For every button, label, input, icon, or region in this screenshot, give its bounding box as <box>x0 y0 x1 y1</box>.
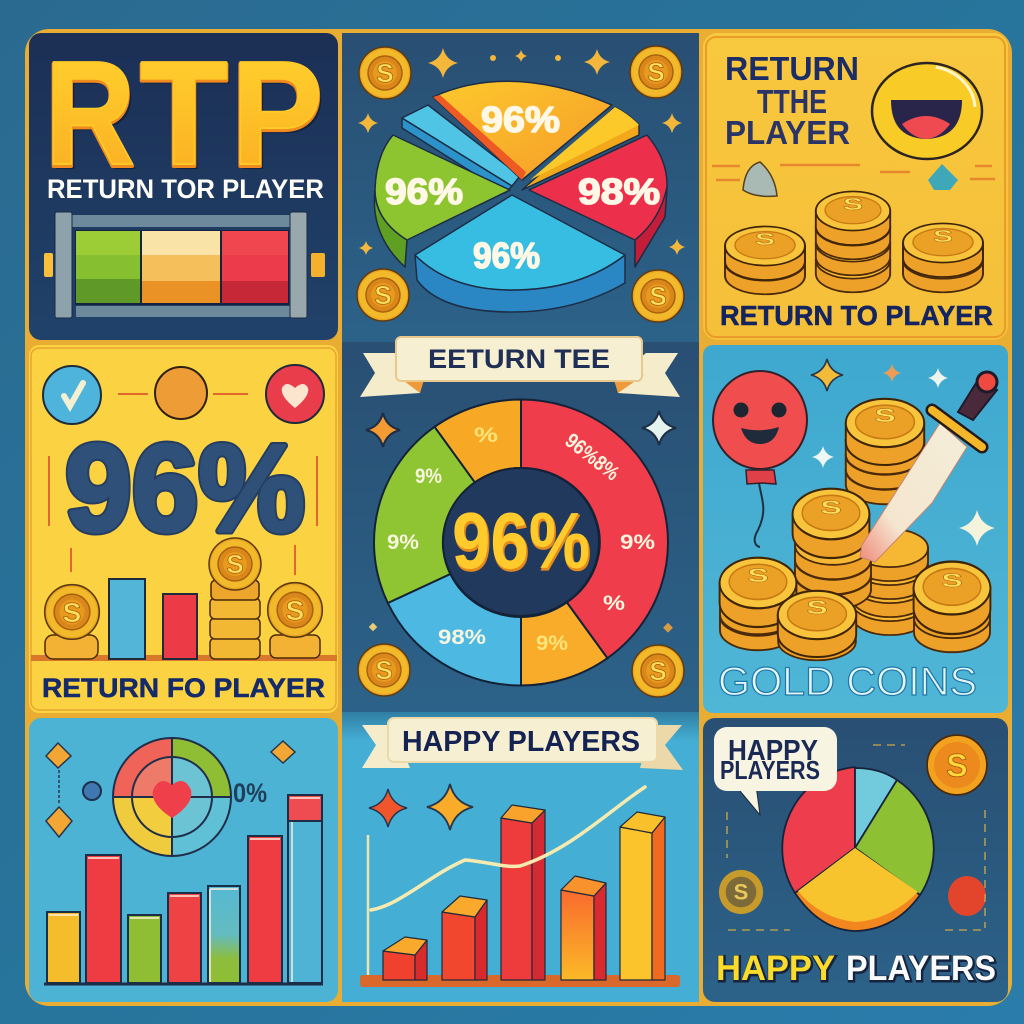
icon: dim coin <box>719 870 763 914</box>
heading: RTP: P <box>234 36 326 201</box>
middle coin stack: S <box>820 497 842 518</box>
heading: RTP: R <box>45 31 135 196</box>
pie labels: 96% <box>473 235 540 276</box>
heading: TTHE <box>757 83 827 120</box>
coin stack and bars: S <box>226 549 244 579</box>
icon: check badge <box>43 366 101 424</box>
icon: coins <box>357 46 684 322</box>
panel: donut chart <box>342 337 699 714</box>
icon: battery gauge <box>44 212 325 318</box>
panel: target and bars <box>29 718 338 1002</box>
icon: coins: S <box>376 58 394 88</box>
decorative dashes <box>712 165 995 180</box>
small icon: circle mark <box>83 782 101 800</box>
icon: coin: S <box>946 747 968 783</box>
pie labels: 96% <box>481 99 560 140</box>
icon: coins: S <box>375 655 393 685</box>
pie labels <box>385 99 660 276</box>
heading: RTP: P <box>231 33 323 198</box>
coin stack and bars: S <box>286 595 304 626</box>
panel: gold coins <box>703 345 1008 713</box>
caption: RETURN FO PLAYER <box>42 673 325 703</box>
panel: 96 percent yellow <box>29 345 338 713</box>
coin stack and bars <box>45 538 322 659</box>
coin stack and bars: S <box>63 597 81 628</box>
caption: PLAYERS <box>846 949 996 988</box>
speech bubble: PLAYERS <box>720 755 820 785</box>
icon: blue gem <box>928 164 958 190</box>
segment labels: % <box>603 592 625 615</box>
ground line <box>31 655 337 661</box>
heading: PLAYER <box>725 114 850 151</box>
heading: RTP <box>45 31 326 201</box>
caption: RETURN TO PLAYER <box>720 300 993 331</box>
coin stack: left: S <box>755 230 775 249</box>
icon: coins: S <box>649 656 667 686</box>
panel: RTP title and battery <box>29 31 338 340</box>
ribbon banner <box>360 337 680 397</box>
icon: laughing face <box>872 63 982 159</box>
big percent: 96% <box>65 420 305 558</box>
segment labels: 96%8% <box>561 429 624 486</box>
segment labels: 9% <box>415 465 442 488</box>
ribbon banner <box>362 718 683 770</box>
sparkles <box>369 784 473 830</box>
center front coin stack <box>778 591 856 660</box>
ribbon text: EETURN TEE <box>428 344 610 374</box>
segment labels: 98% <box>438 626 486 649</box>
subtitle: RETURN TOR PLAYER <box>47 174 324 204</box>
icon: sparkles <box>358 48 685 255</box>
heading: RTP: P <box>231 31 323 196</box>
icon: rock <box>743 162 777 196</box>
connector marks <box>49 394 317 575</box>
bracket marks <box>727 745 985 930</box>
heading: RTP: T <box>143 36 231 201</box>
coin stack: left <box>725 226 805 294</box>
panel: return the player <box>703 33 1008 340</box>
segment labels <box>387 424 655 655</box>
sparkles <box>811 359 995 546</box>
big percent: 96% <box>65 420 305 558</box>
right front coin stack: S <box>941 570 963 591</box>
small percent label: 0% <box>233 778 267 808</box>
pie labels: 98% <box>578 171 660 212</box>
icon: target gauge <box>113 738 231 856</box>
pie labels: 96% <box>385 171 463 212</box>
panel: happy players pie <box>703 718 1008 1002</box>
axis <box>367 835 369 975</box>
middle right coin stack <box>852 529 928 635</box>
icon: smiling balloon <box>713 371 807 547</box>
icon: red token <box>948 876 986 916</box>
coin stack: right <box>903 223 983 292</box>
heading <box>725 50 859 151</box>
icon: coins: S <box>647 57 665 87</box>
icon: heart badge <box>266 365 324 423</box>
sparkles <box>366 411 676 633</box>
ribbon text: HAPPY PLAYERS <box>402 726 640 758</box>
heading: RTP: T <box>140 31 228 196</box>
heading: RTP: R <box>48 36 138 201</box>
inner border <box>31 348 336 710</box>
caption: HAPPY <box>716 949 835 988</box>
center front coin stack: S <box>806 597 828 618</box>
heading: RTP: T <box>140 33 228 198</box>
diamonds <box>46 741 295 837</box>
bar chart <box>44 795 323 984</box>
left front coin stack: S <box>747 565 769 586</box>
heading: RETURN <box>725 50 859 87</box>
panel: happy players bars <box>342 712 699 1002</box>
heading: RTP: R <box>45 33 135 198</box>
segment labels: % <box>474 424 498 447</box>
coin stack: middle <box>816 191 890 292</box>
speech bubble <box>714 727 837 815</box>
coin stack: middle: S <box>843 195 863 214</box>
center value: 96% <box>452 496 590 585</box>
icon: dim coin: S <box>734 880 748 905</box>
segment labels: 9% <box>620 531 655 554</box>
back coin stack: S <box>874 405 896 426</box>
trend line <box>371 787 645 910</box>
icon: coins: S <box>374 280 392 310</box>
panel: exploded pie chart <box>342 33 699 345</box>
segment labels: 9% <box>387 531 419 554</box>
bubble text: HAPPY <box>728 735 818 767</box>
icon: coins <box>358 644 684 697</box>
caption: HAPPY <box>717 950 836 989</box>
caption: PLAYERS <box>847 950 997 989</box>
back coin stack <box>846 399 924 504</box>
left front coin stack <box>720 558 796 650</box>
segment labels: 9% <box>536 632 568 655</box>
middle coin stack <box>793 489 871 609</box>
icon: coin <box>927 735 987 795</box>
3D bars <box>383 805 665 980</box>
icon: orange badge <box>155 367 207 419</box>
pie chart <box>374 81 667 312</box>
icon: sword <box>860 372 997 562</box>
caption <box>716 949 997 989</box>
pie chart <box>782 767 934 931</box>
caption: GOLD COINS <box>718 660 977 704</box>
icon: coins: S <box>649 281 667 311</box>
center value: 96% <box>453 498 591 587</box>
coin stack: right: S <box>933 227 953 246</box>
right front coin stack <box>914 562 990 652</box>
inner border <box>706 37 1005 337</box>
donut chart <box>374 400 668 686</box>
bar base <box>360 975 680 987</box>
